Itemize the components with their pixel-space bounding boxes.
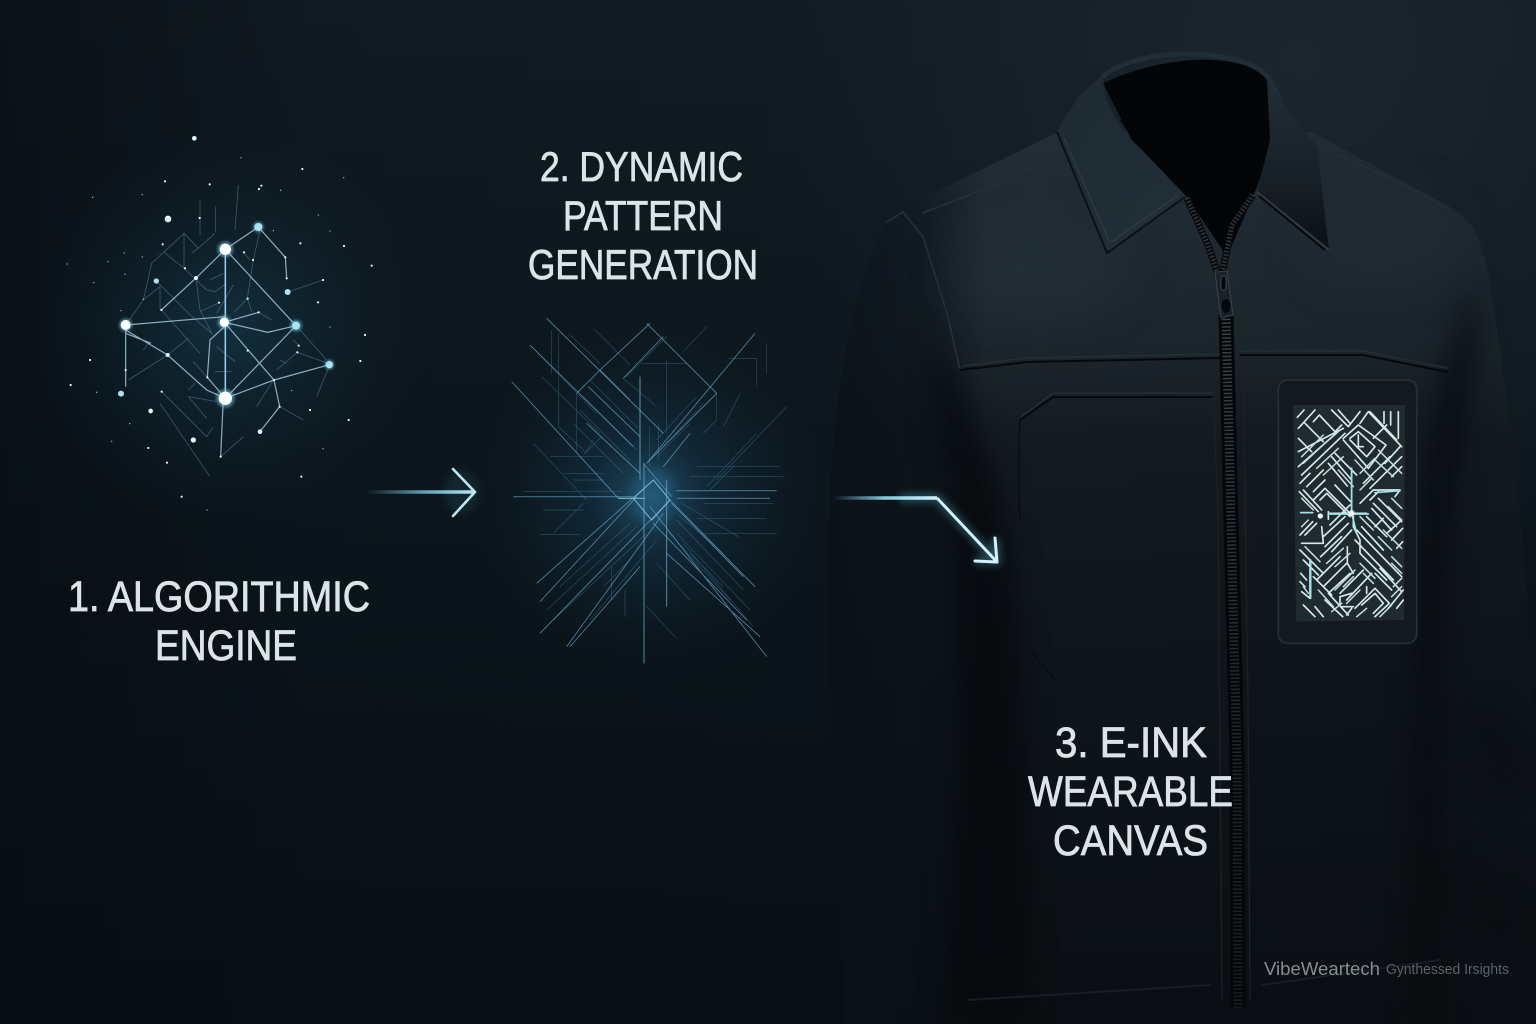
small star points: [71, 169, 372, 497]
heading: step 3: [1028, 719, 1233, 865]
heading: step 3: WEARABLE: [1028, 768, 1233, 816]
heading: step 1: [68, 573, 370, 670]
zipper: [1187, 195, 1253, 1008]
inner neck: [1103, 60, 1273, 257]
primary diagonal and orthogonal lines: [512, 318, 767, 657]
heading: step 2: GENERATION: [528, 241, 758, 288]
footer branding: [1264, 958, 1509, 979]
e-ink circuit pattern: [1297, 410, 1403, 617]
secondary nodes: [118, 223, 333, 397]
shoulder highlight: [950, 220, 1130, 320]
heading: step 2: PATTERN: [563, 192, 723, 239]
heading: step 1: 1. ALGORITHMIC: [68, 573, 370, 621]
panel bezel: [1278, 380, 1417, 643]
right collar flap: [1257, 80, 1329, 250]
panel: algorithmic engine node network: [67, 136, 372, 510]
arrow: pattern to jacket: [832, 498, 997, 562]
sleeve shadows: [933, 290, 1479, 1024]
heading: step 2: 2. DYNAMIC: [540, 143, 743, 190]
faint circuit lines: [126, 185, 328, 477]
footer branding: VibeWeartech: [1264, 958, 1380, 979]
footer branding: Gynthessed Irsights: [1386, 962, 1509, 978]
thin secondary lines: [523, 327, 787, 638]
e-ink screen: [1293, 405, 1405, 622]
primary nodes: [121, 244, 232, 405]
panel: dynamic pattern starburst: [512, 318, 787, 663]
node glow: [119, 222, 334, 408]
e-ink display panel: [1278, 380, 1417, 643]
network connections: [126, 227, 329, 457]
heading: step 2: [528, 143, 758, 288]
illustration: jacket: [827, 54, 1536, 1024]
heading: step 3: CANVAS: [1053, 817, 1208, 865]
heading: step 3: 3. E-INK: [1055, 719, 1207, 767]
zipper slider: [1215, 271, 1233, 318]
seams: [887, 145, 1447, 1000]
jacket body: [827, 132, 1536, 1024]
arrow: engine to pattern: [365, 469, 480, 516]
collar back rim: [1102, 54, 1290, 124]
heading: step 1: ENGINE: [155, 622, 297, 670]
left collar flap: [1057, 75, 1185, 253]
